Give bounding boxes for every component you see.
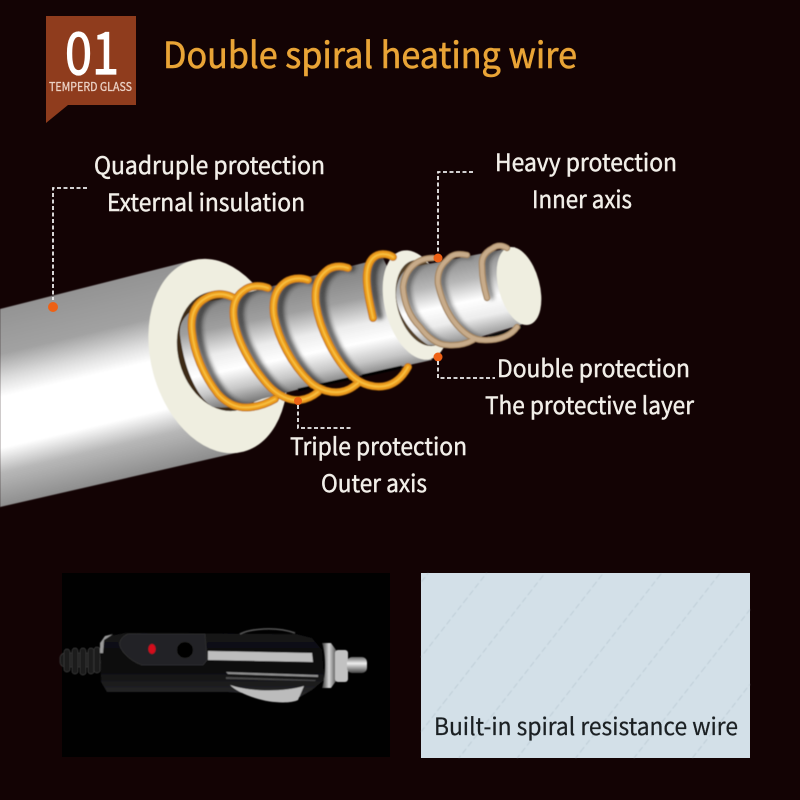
top clip	[240, 629, 295, 634]
badge: 01 tempered glass: 01	[65, 7, 119, 91]
callout: triple protection: Triple protection	[290, 427, 467, 462]
icon: car cigarette lighter plug	[60, 629, 367, 702]
panel: built-in spiral resistance wire: Built-in spiral resistance wire	[434, 707, 738, 742]
side spring clip	[230, 685, 304, 702]
socket	[176, 642, 194, 658]
panel: built-in spiral resistance wire	[421, 573, 750, 758]
orange spiral wire	[192, 254, 408, 407]
hole in protective ring	[387, 254, 461, 352]
callout: triple protection: Outer axis	[321, 464, 427, 499]
red LED	[148, 644, 156, 654]
middle axis cylinder	[180, 258, 432, 407]
hole in outer ring	[164, 280, 284, 422]
badge: 01 tempered glass: TEMPERD GLASS	[49, 78, 132, 95]
plug body	[100, 633, 324, 697]
callout: triple protection	[290, 397, 467, 499]
callout: heavy protection: Heavy protection	[495, 143, 677, 178]
inner axis cylinder	[396, 247, 530, 346]
badge: 01 tempered glass	[46, 7, 136, 123]
outer insulation cylinder	[0, 261, 240, 507]
callout: double protection	[434, 349, 695, 421]
body highlight	[208, 651, 313, 662]
wire shadows on inner axis	[406, 249, 504, 342]
callout: double protection: The protective layer	[485, 386, 695, 421]
metal collar	[322, 643, 336, 688]
panel: car plug photo	[60, 573, 390, 757]
callout: heavy protection	[434, 143, 677, 262]
end cap of inner axis	[489, 242, 549, 330]
protective ring	[372, 243, 460, 367]
callout: quadruple protection: Quadruple protection	[94, 146, 325, 181]
callout: quadruple protection: External insulation	[107, 183, 305, 218]
silver edge on cable end	[100, 634, 113, 653]
outer ring face	[128, 243, 308, 469]
wire shadows on middle axis	[194, 258, 386, 404]
spring cable	[60, 647, 100, 675]
threaded tip base	[335, 650, 348, 682]
title: Double spiral heating wire	[163, 27, 577, 79]
tan spiral wire	[403, 246, 517, 345]
callout: heavy protection: Inner axis	[532, 180, 632, 215]
gap under middle axis	[298, 367, 402, 390]
switch cover	[120, 634, 207, 665]
contact tip	[347, 657, 367, 673]
callout: quadruple protection	[48, 146, 325, 312]
callout: double protection: Double protection	[497, 349, 690, 384]
diagram: layered heating wire cable	[0, 242, 549, 507]
gap under inner axis	[488, 327, 522, 337]
